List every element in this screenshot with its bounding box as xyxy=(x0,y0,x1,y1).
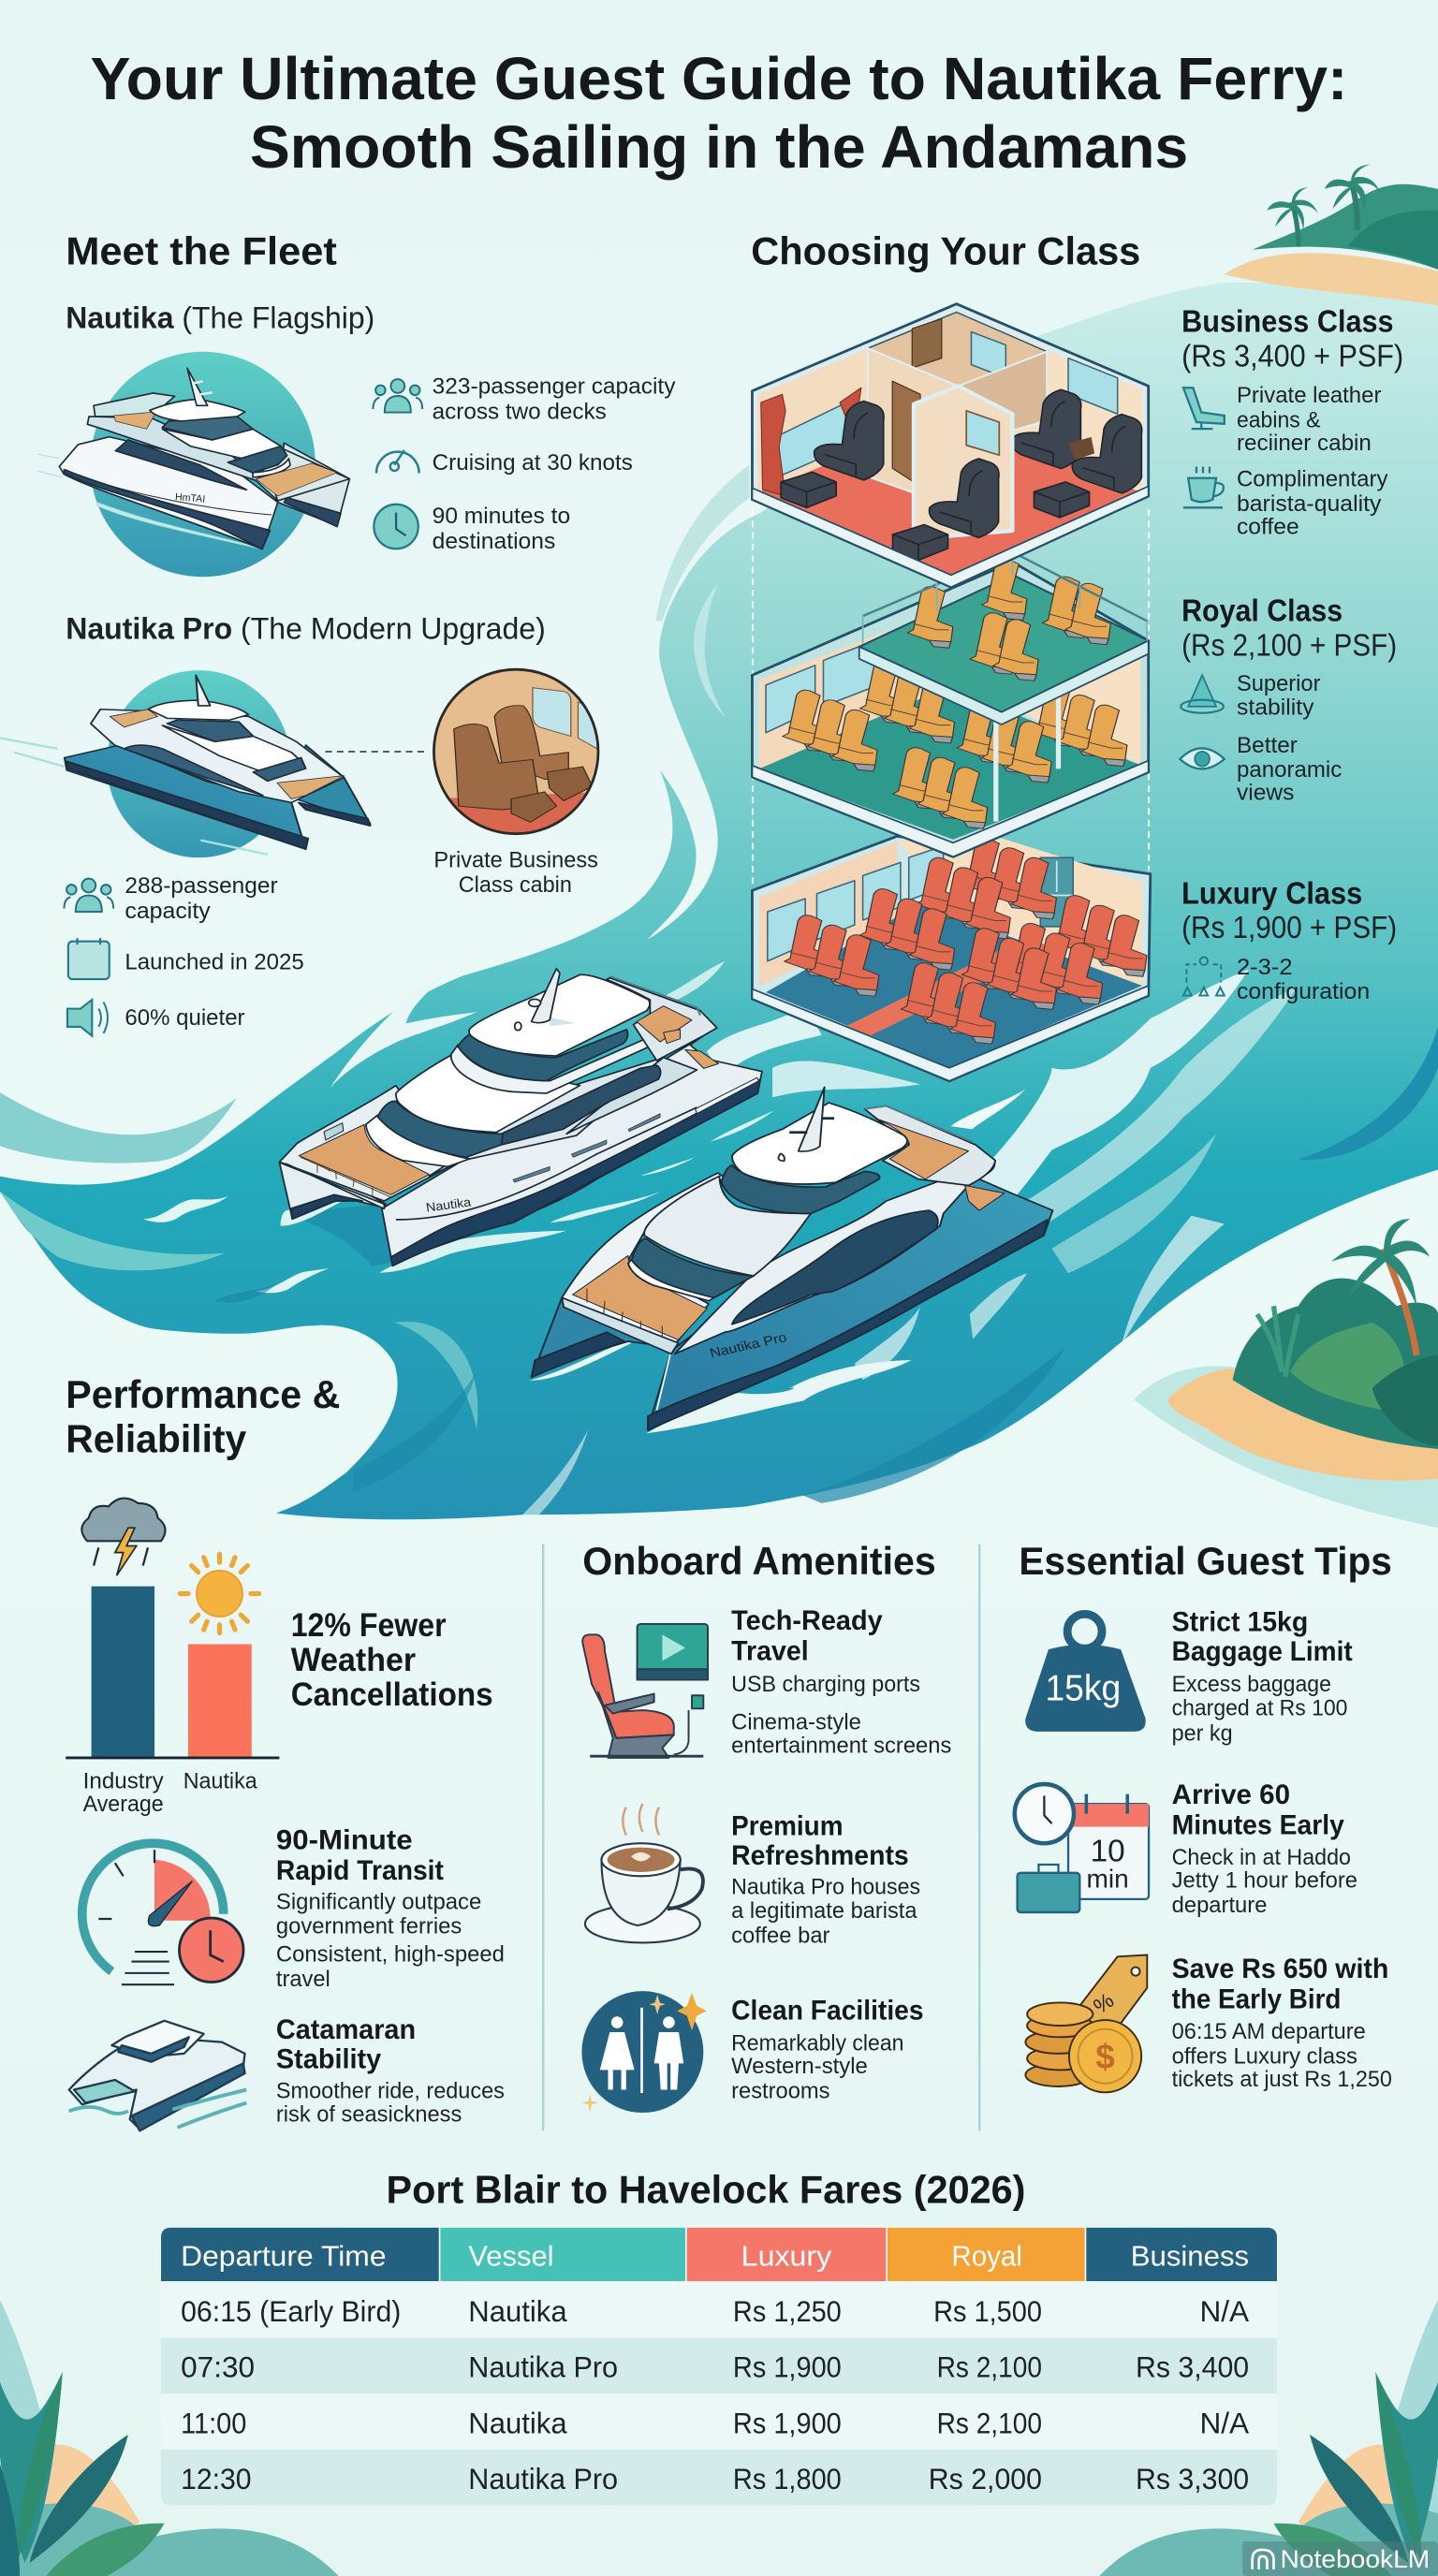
row: 12:30: Nautika Pro xyxy=(468,2462,618,2496)
stat: fewer cancellations: Cancellations xyxy=(291,1676,493,1713)
icon: stability cone xyxy=(1181,675,1224,713)
row: 06:15: N/A xyxy=(1199,2294,1249,2328)
class info: business: Business Class xyxy=(1181,305,1394,340)
text: early bird: 06:15 AM departure xyxy=(1172,2020,1366,2044)
coffee features: coffee xyxy=(1237,515,1299,539)
stat: fewer cancellations xyxy=(291,1607,493,1713)
class info: business xyxy=(1181,305,1403,539)
class info: royal xyxy=(1180,593,1397,806)
subheading: nautika flagship: Nautika (The Flagship) xyxy=(66,300,374,334)
nautika pro specs xyxy=(64,874,304,1036)
inset caption: Class cabin xyxy=(459,873,572,898)
text: rapid transit xyxy=(276,1824,505,1992)
speed text: Cruising at 30 knots xyxy=(433,451,633,476)
row: 06:15: 06:15 (Early Bird) xyxy=(181,2294,401,2328)
icon: clock, calendar and suitcase xyxy=(1015,1784,1149,1912)
text: rapid transit: Rapid Transit xyxy=(276,1855,444,1886)
ferry: nautika large xyxy=(280,969,774,1273)
text: early bird: Save Rs 650 with xyxy=(1172,1954,1388,1984)
ocean wave background xyxy=(0,283,1438,1519)
fare table xyxy=(161,2168,1277,2506)
inset caption: Private Business xyxy=(433,849,598,873)
bar: industry average xyxy=(92,1587,154,1757)
deck: royal class cutaway xyxy=(752,552,1149,856)
text: premium refreshments: coffee bar xyxy=(731,1924,830,1948)
launch text: Launched in 2025 xyxy=(125,951,304,975)
capacity text xyxy=(433,374,676,425)
stability text: stability xyxy=(1237,695,1314,720)
inset caption xyxy=(433,849,598,898)
ferry: nautika pro large: Nautika Pro xyxy=(708,1330,788,1361)
table header: Royal xyxy=(951,2239,1022,2272)
class info: royal: (Rs 2,100 + PSF) xyxy=(1181,628,1397,663)
text: clean facilities: Remarkably clean xyxy=(731,2031,903,2056)
heading: performance: Reliability xyxy=(66,1417,247,1461)
bar labels: Average xyxy=(83,1793,164,1817)
section: performance and reliability xyxy=(66,1372,505,2130)
row: 11:00 xyxy=(181,2406,1249,2439)
text: clean facilities: Clean Facilities xyxy=(731,1996,924,2027)
row: 11:00: Rs 1,900 xyxy=(733,2406,842,2439)
capacity text: 288-passenger xyxy=(125,874,278,899)
duration text: 90 minutes to xyxy=(433,505,570,529)
text: premium refreshments: Nautika Pro houses xyxy=(731,1876,920,1900)
icon: clock, calendar and suitcase: 10 xyxy=(1091,1835,1125,1869)
configuration text: 2-3-2 xyxy=(1237,956,1293,980)
row: 06:15: Rs 1,500 xyxy=(933,2294,1042,2328)
icon: 15kg weight: 15kg xyxy=(1045,1669,1121,1709)
text: catamaran stability: Stability xyxy=(276,2044,382,2075)
row: 07:30: Rs 1,900 xyxy=(733,2350,842,2384)
text: early bird xyxy=(1172,1954,1392,2092)
icon: clock, calendar and suitcase: min xyxy=(1087,1865,1129,1894)
bar: nautika xyxy=(188,1645,252,1758)
text: baggage limit: Baggage Limit xyxy=(1172,1636,1353,1667)
row: 07:30 xyxy=(181,2350,1249,2384)
heading: performance xyxy=(66,1372,340,1461)
row: 12:30: 12:30 xyxy=(181,2462,252,2496)
capacity text xyxy=(125,874,278,924)
text: catamaran stability: Catamaran xyxy=(276,2014,416,2045)
stat: fewer cancellations: Weather xyxy=(291,1642,416,1678)
configuration text xyxy=(1237,956,1370,1004)
section: onboard amenities xyxy=(581,1539,951,2113)
table rows background xyxy=(161,2280,1277,2506)
text: clean facilities: Western-style xyxy=(731,2055,868,2079)
icon: gauge xyxy=(376,450,419,473)
text: rapid transit: Significantly outpace xyxy=(276,1890,481,1914)
heading: choosing your class: Choosing Your Class xyxy=(751,229,1140,273)
text: catamaran stability xyxy=(276,2014,505,2128)
section: choosing your class xyxy=(751,229,1403,1081)
text: rapid transit: travel xyxy=(276,1968,330,1992)
icon: coins and discount tag: $ xyxy=(1095,2038,1115,2076)
text: clean facilities xyxy=(731,1996,924,2103)
table header xyxy=(161,2228,1277,2281)
class info: luxury: Luxury Class xyxy=(1181,876,1362,911)
inset: private business cabin xyxy=(430,669,606,842)
watermark: notebooklm: NotebookLM xyxy=(1280,2544,1430,2573)
text: tech-ready: USB charging ports xyxy=(731,1673,920,1697)
icon: seat configuration xyxy=(1183,958,1225,996)
text: baggage limit: per kg xyxy=(1172,1721,1233,1746)
noise text: 60% quieter xyxy=(125,1006,245,1031)
coffee features xyxy=(1237,468,1388,539)
bar chart: weather cancellations xyxy=(66,1499,279,1817)
ferry: nautika pro large xyxy=(530,1087,1052,1433)
island: top right with palms xyxy=(1225,165,1438,305)
text: tech-ready: Travel xyxy=(731,1636,809,1667)
icon: sun xyxy=(180,1554,259,1633)
text: rapid transit: government ferries xyxy=(276,1915,462,1939)
row: 07:30: Rs 2,100 xyxy=(937,2350,1042,2384)
table header: Luxury xyxy=(741,2239,832,2272)
icon: restroom xyxy=(581,1991,707,2113)
text: tech-ready: Tech-Ready xyxy=(731,1605,883,1636)
views text xyxy=(1237,734,1342,806)
business features: reciiner cabin xyxy=(1237,432,1372,456)
title: Smooth Sailing in the Andamans xyxy=(250,113,1188,181)
text: arrive early: Check in at Haddo xyxy=(1172,1846,1351,1870)
row: 11:00: Nautika xyxy=(468,2406,567,2439)
text: baggage limit: Strict 15kg xyxy=(1172,1606,1308,1637)
text: rapid transit: 90-Minute xyxy=(276,1824,413,1855)
row: 07:30: Rs 3,400 xyxy=(1136,2350,1249,2384)
coffee features: Complimentary xyxy=(1237,468,1388,492)
icon: speaker xyxy=(67,1000,108,1036)
icon: coffee cup xyxy=(1183,466,1224,507)
table title: Port Blair to Havelock Fares (2026) xyxy=(387,2168,1025,2212)
row: 11:00: 11:00 xyxy=(181,2406,246,2439)
text: early bird: offers Luxury class xyxy=(1172,2044,1357,2069)
views text: views xyxy=(1237,782,1294,806)
text: arrive early: departure xyxy=(1172,1894,1267,1918)
text: premium refreshments: Premium xyxy=(731,1810,844,1841)
icon: flagship ferry in circle xyxy=(37,352,349,577)
text: early bird: tickets at just Rs 1,250 xyxy=(1172,2068,1392,2092)
business features: Private leather xyxy=(1237,384,1382,408)
duration text xyxy=(433,505,570,554)
flagship specs xyxy=(373,374,676,554)
class info: royal: Royal Class xyxy=(1181,593,1343,628)
views text: Better xyxy=(1237,734,1298,758)
text: arrive early: Minutes Early xyxy=(1172,1810,1344,1841)
icon: storm cloud xyxy=(81,1499,166,1575)
deck: luxury class cutaway xyxy=(752,831,1151,1081)
views text: panoramic xyxy=(1237,758,1342,783)
island: right with palm xyxy=(1134,1219,1438,1528)
row: 12:30 xyxy=(181,2462,1249,2496)
icon: flagship ferry in circle: HmTAI xyxy=(174,491,206,505)
icon: coffee cup xyxy=(585,1804,703,1942)
row: 06:15: Nautika xyxy=(468,2294,567,2328)
stat: fewer cancellations: 12% Fewer xyxy=(291,1607,447,1644)
text: baggage limit: charged at Rs 100 xyxy=(1172,1696,1347,1720)
business features: eabins & xyxy=(1237,408,1321,432)
icon: coins and discount tag: % xyxy=(1089,1987,1118,2018)
text: arrive early: Jetty 1 hour before xyxy=(1172,1869,1357,1894)
text: premium refreshments xyxy=(731,1810,920,1948)
title: Your Ultimate Guest Guide to Nautika Ferry: xyxy=(91,45,1347,112)
text: clean facilities: restrooms xyxy=(731,2079,829,2103)
text: arrive early: Arrive 60 xyxy=(1172,1779,1290,1810)
decorative leaves: bottom left xyxy=(0,2300,339,2576)
icon: seat with screen xyxy=(582,1624,708,1758)
ferry: nautika large: Nautika xyxy=(425,1194,472,1215)
bar labels xyxy=(83,1769,258,1817)
class info: luxury: (Rs 1,900 + PSF) xyxy=(1181,911,1397,945)
text: catamaran stability: Smoother ride, reduces xyxy=(276,2079,505,2103)
text: tech-ready: entertainment screens xyxy=(731,1734,951,1759)
text: baggage limit: Excess baggage xyxy=(1172,1673,1331,1697)
row: 12:30: Rs 1,800 xyxy=(733,2462,842,2496)
text: premium refreshments: a legitimate barista xyxy=(731,1899,917,1924)
class info: business: (Rs 3,400 + PSF) xyxy=(1181,339,1403,373)
icon: 15kg weight xyxy=(1025,1614,1146,1732)
duration text: destinations xyxy=(433,530,555,554)
dashed guides between decks xyxy=(753,509,1149,887)
text: early bird: the Early Bird xyxy=(1172,1984,1341,2015)
text: arrive early xyxy=(1172,1779,1357,1918)
row: 11:00: Rs 2,100 xyxy=(937,2406,1042,2439)
capacity text: across two decks xyxy=(433,401,607,425)
section: essential guest tips xyxy=(1015,1539,1392,2092)
icon: nautika pro ferry in circle xyxy=(0,670,370,857)
business features xyxy=(1237,384,1382,456)
stability text: Superior xyxy=(1237,672,1321,696)
icon: eye xyxy=(1180,748,1225,768)
heading: meet the fleet: Meet the Fleet xyxy=(66,229,337,273)
icon: speedometer and clock xyxy=(82,1843,243,1984)
text: tech-ready xyxy=(731,1605,951,1759)
decorative leaves: bottom right xyxy=(1099,2300,1438,2576)
heading: performance: Performance & xyxy=(66,1372,340,1416)
row: 12:30: Rs 3,300 xyxy=(1136,2462,1249,2496)
table header: Vessel xyxy=(468,2239,554,2272)
class info: luxury xyxy=(1181,876,1397,1004)
dashed connector xyxy=(326,751,426,753)
row: 11:00: N/A xyxy=(1199,2406,1249,2439)
row: 12:30: Rs 2,000 xyxy=(929,2462,1042,2496)
icon: catamaran on waves xyxy=(69,2021,246,2130)
title xyxy=(91,45,1347,181)
text: rapid transit: Consistent, high-speed xyxy=(276,1943,505,1968)
icon: clock xyxy=(374,505,418,549)
icon: passengers xyxy=(373,379,422,413)
section: meet the fleet xyxy=(0,229,676,1036)
row: 06:15: Rs 1,250 xyxy=(733,2294,842,2328)
bar labels: Industry xyxy=(83,1769,164,1793)
row: 07:30: Nautika Pro xyxy=(468,2350,618,2384)
text: catamaran stability: risk of seasickness xyxy=(276,2103,462,2128)
capacity text: 323-passenger capacity xyxy=(433,374,676,399)
icon: recliner xyxy=(1183,388,1225,429)
icon: coins and discount tag xyxy=(1025,1955,1147,2092)
heading: essential guest tips: Essential Guest Tips xyxy=(1019,1539,1392,1583)
coffee features: barista-quality xyxy=(1237,492,1382,517)
text: tech-ready: Cinema-style xyxy=(731,1711,861,1735)
heading: onboard amenities: Onboard Amenities xyxy=(582,1539,936,1583)
configuration text: configuration xyxy=(1237,980,1370,1004)
table header: Business xyxy=(1131,2239,1249,2272)
subheading: nautika pro: Nautika Pro (The Modern Upgrade) xyxy=(66,612,546,646)
icon: passengers xyxy=(64,879,113,912)
capacity text: capacity xyxy=(125,900,211,924)
text: premium refreshments: Refreshments xyxy=(731,1840,909,1871)
bar labels: Nautika xyxy=(183,1769,258,1793)
stability text xyxy=(1237,672,1321,720)
icon: calendar xyxy=(68,938,110,979)
row: 07:30: 07:30 xyxy=(181,2350,255,2384)
watermark: notebooklm xyxy=(1242,2541,1438,2576)
table header: Departure Time xyxy=(181,2239,387,2272)
text: baggage limit xyxy=(1172,1606,1353,1746)
row: 06:15 xyxy=(181,2294,1249,2328)
deck: business class cutaway xyxy=(752,304,1149,587)
